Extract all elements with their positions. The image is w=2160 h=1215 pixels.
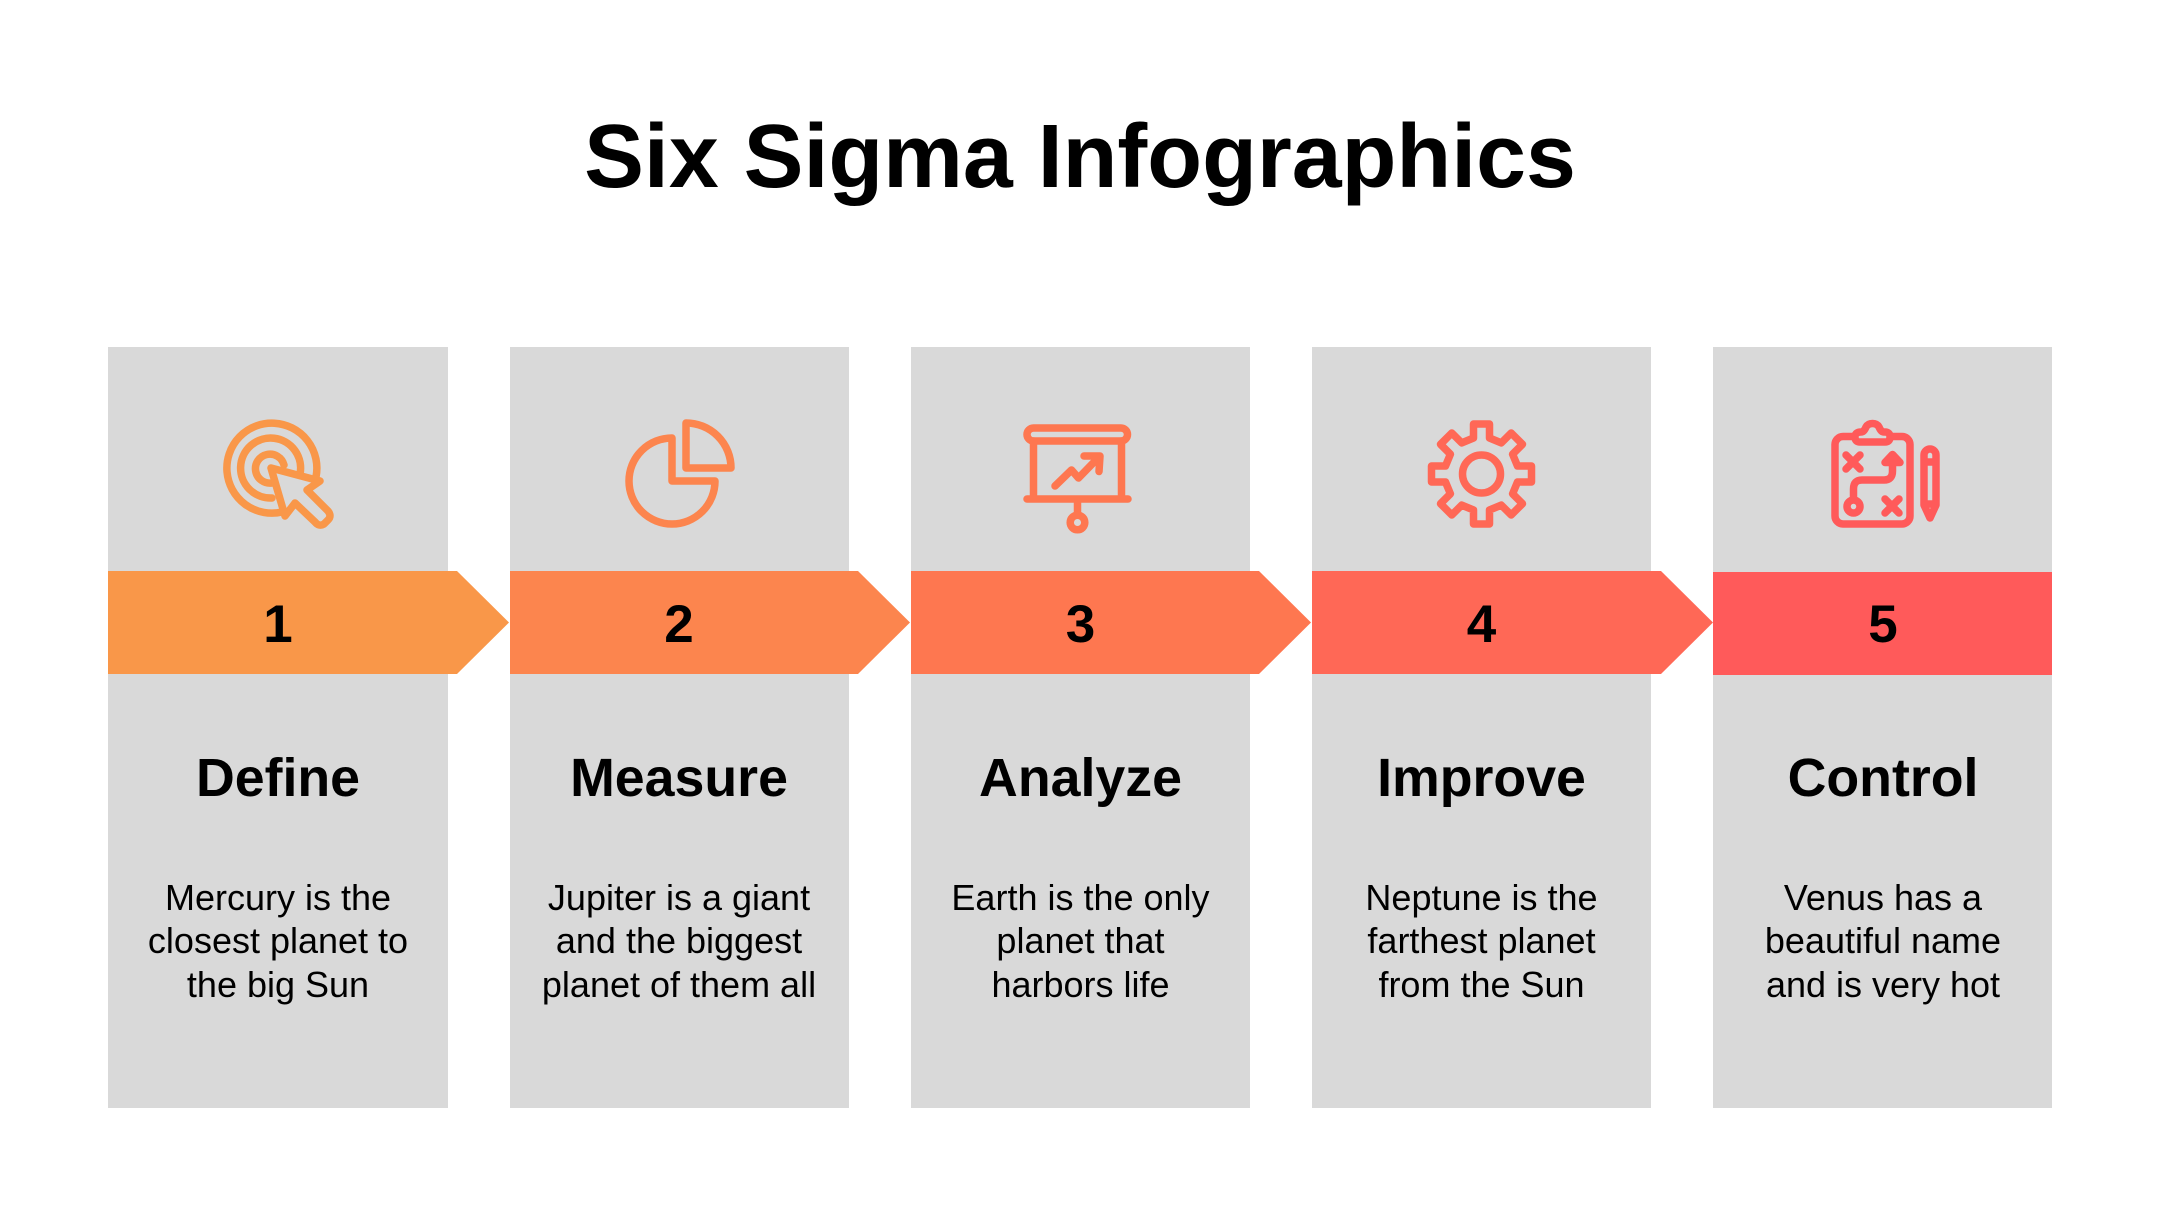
description: analyze: Earth is the only: [951, 877, 1210, 918]
icon: clipboard plan and pencil: [1835, 424, 1936, 524]
heading: control: Control: [1788, 748, 1978, 808]
description: define: Mercury is the: [165, 877, 391, 918]
arrow banner 3: [911, 571, 1311, 674]
panel: control: [1713, 347, 2052, 1108]
panel background: measure: [510, 347, 849, 1108]
icon: gear: [1432, 424, 1532, 524]
icon: presentation board: [1027, 428, 1128, 530]
panel background: define: [108, 347, 448, 1108]
number 1: 1: [263, 595, 293, 654]
description: control: beautiful name: [1765, 920, 2001, 961]
panel background: analyze: [911, 347, 1250, 1108]
description: analyze: planet that: [996, 920, 1165, 961]
panel background: improve: [1312, 347, 1651, 1108]
description: improve: Neptune is the: [1365, 877, 1598, 918]
description: measure: Jupiter is a giant: [548, 877, 810, 918]
icon: target with cursor: [227, 423, 330, 525]
description: define: the big Sun: [187, 964, 369, 1005]
icon: pie chart: [629, 423, 731, 524]
title: Six Sigma Infographics: [584, 107, 1576, 207]
panel: define: [108, 347, 509, 1108]
heading: analyze: Analyze: [979, 748, 1182, 808]
description: control: Venus has a: [1784, 877, 1983, 918]
description: analyze: harbors life: [991, 964, 1170, 1005]
description: improve: from the Sun: [1378, 964, 1585, 1005]
description: control: and is very hot: [1766, 964, 2000, 1005]
arrow banner 4: [1312, 571, 1713, 674]
description: improve: farthest planet: [1367, 920, 1596, 961]
panel background: control: [1713, 347, 2052, 1108]
description: measure: planet of them all: [542, 964, 816, 1005]
number banner 5: [1713, 572, 2052, 675]
panel: analyze: [911, 347, 1311, 1108]
number 5: 5: [1868, 595, 1898, 654]
number 4: 4: [1467, 595, 1497, 654]
heading: define: Define: [196, 748, 360, 808]
heading: improve: Improve: [1377, 748, 1586, 808]
arrow banner 1: [108, 571, 509, 674]
panel: measure: [510, 347, 910, 1108]
number 2: 2: [664, 595, 694, 654]
description: measure: and the biggest: [556, 920, 802, 961]
number 3: 3: [1066, 595, 1095, 654]
panel: improve: [1312, 347, 1713, 1108]
heading: measure: Measure: [570, 748, 788, 808]
arrow banner 2: [510, 571, 910, 674]
description: define: closest planet to: [148, 920, 408, 961]
